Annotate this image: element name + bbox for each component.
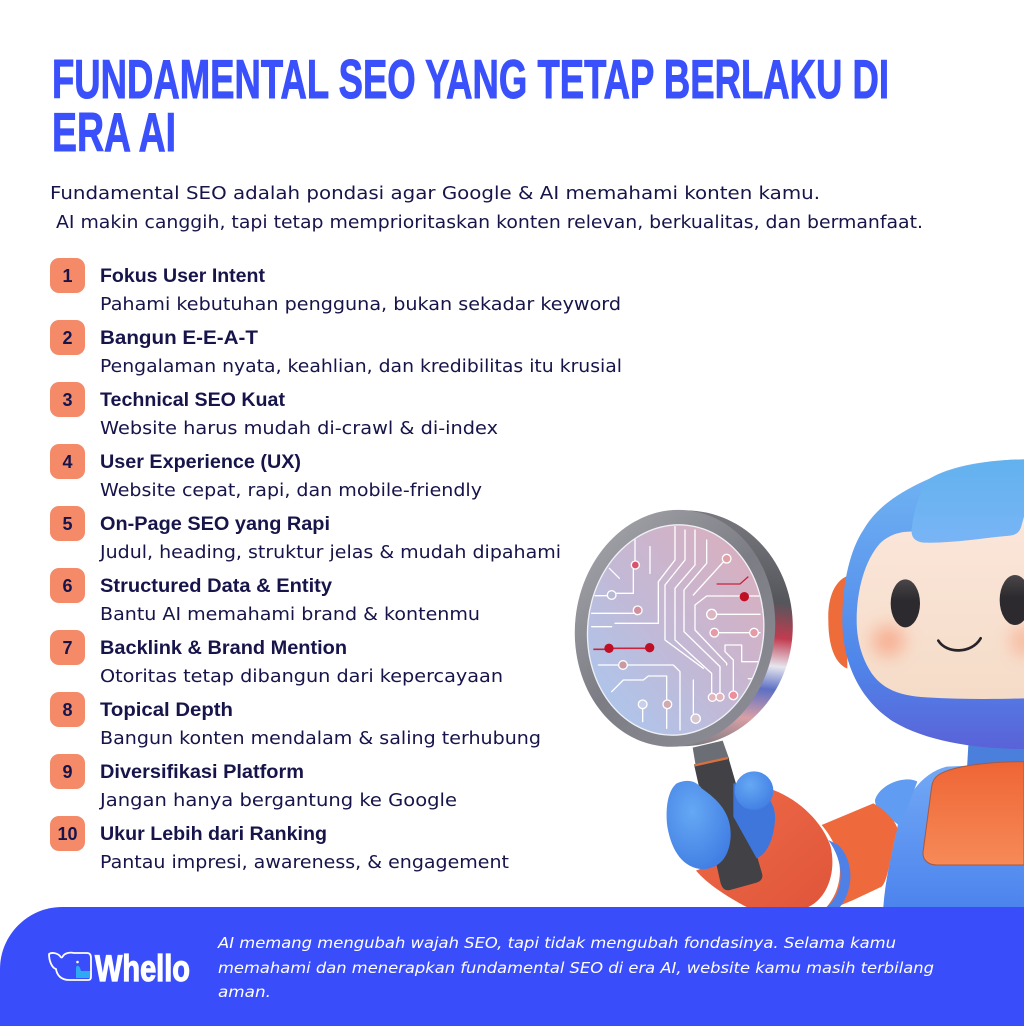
item 6 xyxy=(50,568,480,625)
item 10: Ukur Lebih dari Ranking xyxy=(100,823,327,845)
item 5: Judul, heading, struktur jelas & mudah dipahami xyxy=(99,542,561,563)
item 2: Pengalaman nyata, keahlian, dan kredibilitas itu krusial xyxy=(100,356,622,377)
hair panel xyxy=(912,459,1024,543)
robot head xyxy=(828,459,1024,749)
title: ERA AI xyxy=(52,101,176,163)
circuit traces on lens xyxy=(592,527,760,730)
closing message xyxy=(217,934,934,1001)
item 6: Bantu AI memahami brand & kontenmu xyxy=(100,604,480,625)
item 5: 5 xyxy=(62,514,73,534)
logo: Whello xyxy=(49,948,190,989)
item 3 xyxy=(50,382,498,439)
item 7: Backlink & Brand Mention xyxy=(100,637,347,659)
item 5 xyxy=(50,506,561,563)
closing message: aman. xyxy=(218,983,271,1001)
item 4: Website cepat, rapi, dan mobile-friendly xyxy=(100,480,482,501)
item 1: Fokus User Intent xyxy=(100,265,265,287)
item 5: On-Page SEO yang Rapi xyxy=(100,513,330,535)
intro text: Fundamental SEO adalah pondasi agar Google & AI memahami konten kamu. xyxy=(50,183,820,204)
robot arm xyxy=(696,779,917,907)
footer band xyxy=(0,907,1024,1026)
intro text: AI makin canggih, tapi tetap memprioritaskan konten relevan, berkualitas, dan bermanfaat. xyxy=(56,212,923,233)
item 9 xyxy=(50,754,457,811)
item 8: Topical Depth xyxy=(100,699,233,721)
item 4: User Experience (UX) xyxy=(100,451,301,473)
item 4 xyxy=(50,444,482,501)
eyes xyxy=(891,575,1024,627)
item 1 xyxy=(50,258,621,315)
item 6: Structured Data & Entity xyxy=(100,575,332,597)
title xyxy=(52,48,889,163)
item 9: Diversifikasi Platform xyxy=(100,761,304,783)
item 2: 2 xyxy=(62,328,73,348)
item 10: Pantau impresi, awareness, & engagement xyxy=(100,852,509,873)
item 4: 4 xyxy=(62,452,73,472)
item 2: Bangun E-E-A-T xyxy=(100,327,258,349)
smile xyxy=(938,638,981,650)
item 9: 9 xyxy=(62,762,73,782)
item 9: Jangan hanya bergantung ke Google xyxy=(99,790,457,811)
illustration: robot holding magnifying glass xyxy=(563,459,1024,907)
item 7: Otoritas tetap dibangun dari kepercayaan xyxy=(100,666,503,687)
item 10: 10 xyxy=(57,824,78,844)
item 8: 8 xyxy=(62,700,73,720)
intro text xyxy=(50,183,923,233)
robot hand xyxy=(667,771,775,869)
item 2 xyxy=(50,320,622,377)
item 1: Pahami kebutuhan pengguna, bukan sekadar keyword xyxy=(100,294,621,315)
closing message: memahami dan menerapkan fundamental SEO di era AI, website kamu masih terbilang xyxy=(218,959,934,977)
item 8: Bangun konten mendalam & saling terhubung xyxy=(100,728,541,749)
item 10 xyxy=(50,816,509,873)
item 3: Technical SEO Kuat xyxy=(100,389,286,411)
item 3: Website harus mudah di-crawl & di-index xyxy=(100,418,498,439)
item 6: 6 xyxy=(62,576,73,596)
item 1: 1 xyxy=(62,266,73,286)
list of fundamentals xyxy=(50,258,622,873)
closing message: AI memang mengubah wajah SEO, tapi tidak mengubah fondasinya. Selama kamu xyxy=(217,934,896,952)
item 7 xyxy=(50,630,503,687)
item 3: 3 xyxy=(62,390,73,410)
robot body xyxy=(883,745,1024,907)
item 7: 7 xyxy=(62,638,73,658)
item 8 xyxy=(50,692,541,749)
magnifying glass xyxy=(574,510,793,890)
logo: Whello: Whello xyxy=(95,948,190,989)
